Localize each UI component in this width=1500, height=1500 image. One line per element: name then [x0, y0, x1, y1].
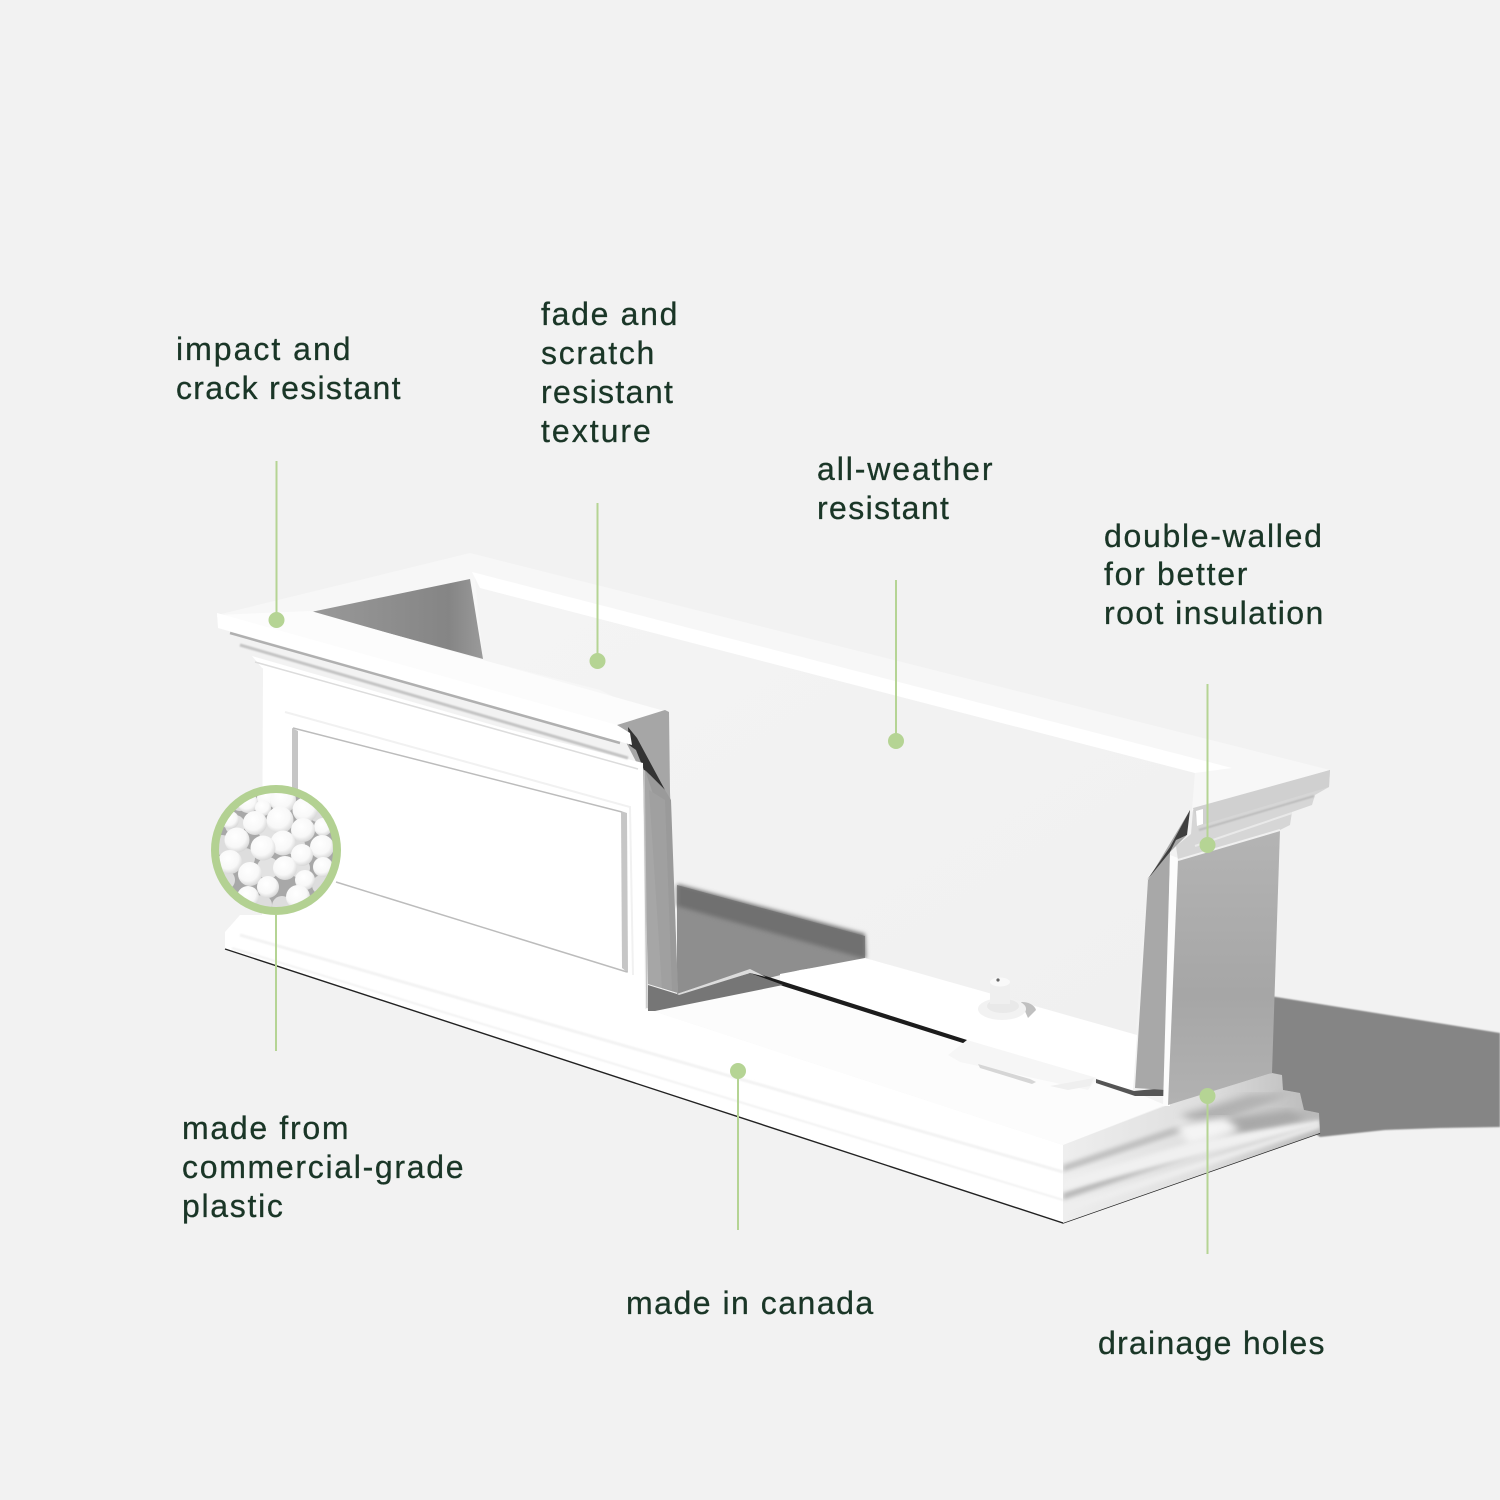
callout connector: fade and scratch resistant texture — [590, 503, 606, 669]
lower floor between walls — [650, 985, 1165, 1145]
drain plate — [948, 1040, 1097, 1090]
base molding — [225, 915, 1323, 1225]
label: double-walled for better root insulation: double-walled — [1104, 518, 1324, 554]
label: all-weather resistant: all-weather — [817, 451, 994, 487]
left rim molding — [217, 613, 642, 772]
label: fade and scratch resistant texture: scratch — [541, 335, 656, 371]
gray wall section and slot shadow near left cut — [648, 969, 783, 1011]
label: impact and crack resistant: impact and — [176, 331, 353, 367]
left end panel — [262, 668, 647, 1010]
label: all-weather resistant: resistant — [817, 490, 950, 526]
label: fade and scratch resistant texture: texture — [541, 413, 653, 449]
label: double-walled for better root insulation: root insulation — [1104, 595, 1325, 631]
right cross-section — [1135, 810, 1190, 1106]
interior far-end wall opening — [311, 579, 483, 659]
label: impact and crack resistant: crack resistant — [176, 370, 402, 406]
callout connector: impact and crack resistant — [268, 461, 284, 628]
right rim molding — [1176, 770, 1330, 860]
material close-up circle: plastic pellets — [212, 787, 338, 916]
label: made in canada: made in canada — [626, 1285, 875, 1321]
label: fade and scratch resistant texture: resistant — [541, 374, 674, 410]
label: made from commercial-grade plastic: commercial-grade — [182, 1149, 465, 1185]
bright rim highlight — [472, 572, 1232, 773]
label: double-walled for better root insulation: for better — [1104, 556, 1249, 592]
rear rim top surface — [217, 553, 1330, 812]
label: drainage holes: drainage holes — [1098, 1325, 1326, 1361]
front rim top surface — [217, 611, 668, 730]
label: made from commercial-grade plastic: plastic — [182, 1188, 285, 1224]
base side moldings — [1063, 1070, 1323, 1225]
inner floor shadow — [677, 884, 866, 994]
right end face — [1168, 830, 1280, 1105]
inner floor — [780, 958, 1137, 1090]
drainage slot — [748, 971, 967, 1044]
left wall cross-section — [617, 710, 678, 993]
callout connector: double-walled — [1200, 684, 1216, 853]
label: fade and scratch resistant texture: fade and — [541, 296, 679, 332]
black gap at right end — [1096, 1079, 1165, 1096]
callout connector: made in canada — [730, 1063, 746, 1230]
raised panel frame — [285, 712, 633, 975]
cast shadow to the right of the planter — [1270, 996, 1500, 1137]
callout connector: drainage holes — [1200, 1088, 1216, 1254]
callout connector: commercial-grade plastic — [275, 914, 277, 1051]
label: made from commercial-grade plastic: made from — [182, 1110, 350, 1146]
drain peg — [978, 978, 1036, 1020]
inner back wall — [475, 578, 1195, 1040]
callout connector: all-weather resistant — [888, 580, 904, 749]
planter cutaway illustration — [217, 553, 1330, 1225]
